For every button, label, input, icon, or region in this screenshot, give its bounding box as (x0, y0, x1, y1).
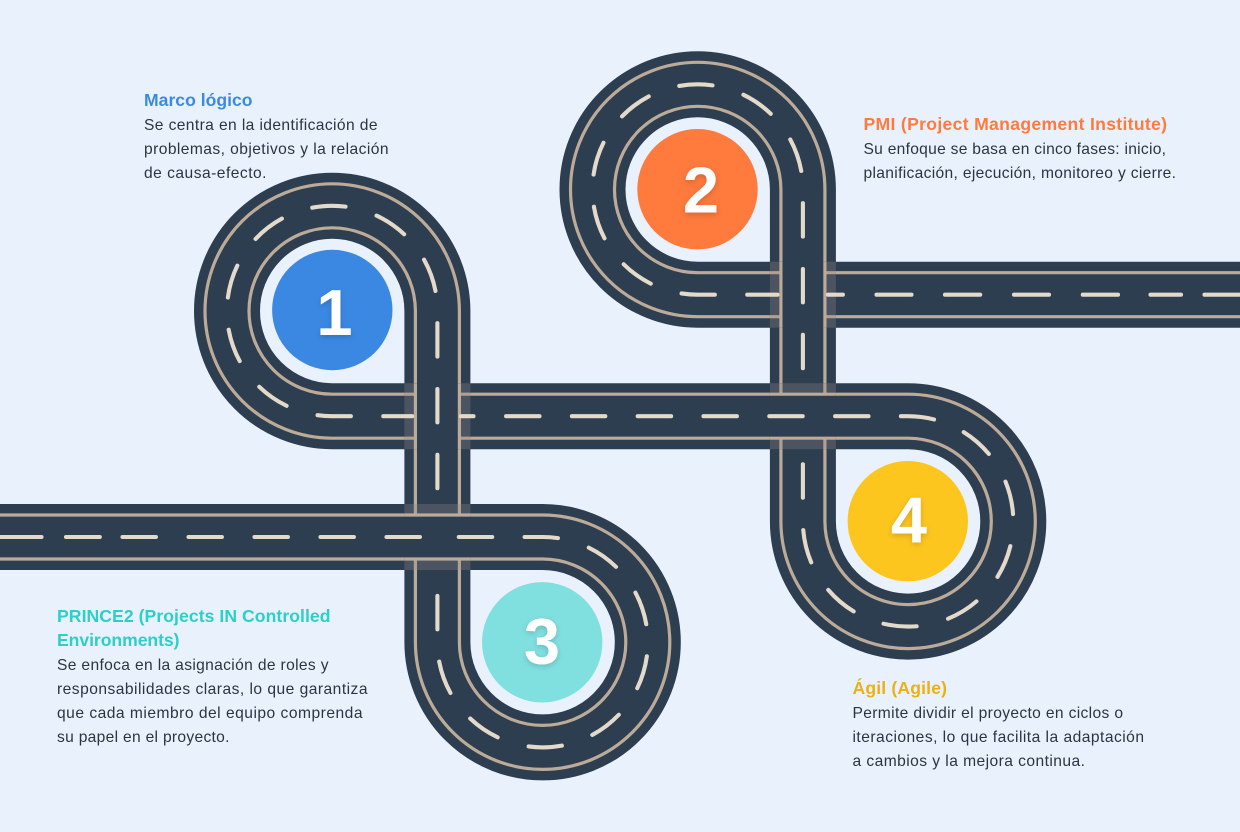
text block: PRINCE2: PRINCE2 (Projects IN Controlled (57, 606, 330, 626)
text block: Marco lógico: Se centra en la identificación de (144, 117, 378, 134)
text block: PMI: Su enfoque se basa en cinco fases: inicio, (864, 141, 1166, 158)
marker 2: 2 (683, 154, 719, 226)
marker 1: 1 (316, 276, 353, 349)
crossing: bottom road passing over vertical road (404, 504, 470, 570)
text block: Ágil: Permite dividir el proyecto en ciclos o (852, 705, 1123, 722)
winding road (0, 84, 1240, 747)
marker 3 (482, 582, 602, 702)
text block: Ágil (852, 677, 1144, 770)
text block: PMI (864, 114, 1176, 182)
marker 4 (848, 461, 968, 581)
text block: PRINCE2: su papel en el proyecto. (57, 729, 230, 746)
crossing: loop 1 road passing over horizontal road (404, 383, 470, 449)
crossing: loop 2 road passing over top road (770, 262, 836, 328)
text block: Ágil: iteraciones, lo que facilita la adaptación (852, 729, 1144, 746)
text block: Marco lógico (144, 90, 388, 182)
text block: Ágil: Ágil (Agile) (852, 677, 947, 698)
text block: PRINCE2: Se enfoca en la asignación de roles y (57, 657, 329, 674)
text block: PMI: planificación, ejecución, monitoreo y cierre. (864, 165, 1176, 182)
text block: PRINCE2: que cada miembro del equipo comprenda (57, 705, 363, 722)
marker 3: 3 (524, 605, 560, 678)
marker 2 (637, 129, 758, 249)
text block: PRINCE2: Environments) (57, 630, 180, 650)
text block: PMI: PMI (Project Management Institute) (864, 114, 1167, 134)
text block: Marco lógico: Marco lógico (144, 90, 253, 110)
crossing: middle road passing over vertical road (770, 383, 836, 449)
marker 1 (272, 250, 392, 370)
text block: Ágil: a cambios y la mejora continua. (852, 753, 1085, 770)
text block: Marco lógico: de causa-efecto. (144, 165, 266, 182)
text block: PRINCE2: responsabilidades claras, lo que garantiza (57, 681, 368, 698)
marker 4: 4 (891, 484, 927, 556)
text block: PRINCE2 (57, 606, 368, 746)
text block: Marco lógico: problemas, objetivos y la relación (144, 141, 388, 158)
road centre dashes (0, 84, 1240, 747)
